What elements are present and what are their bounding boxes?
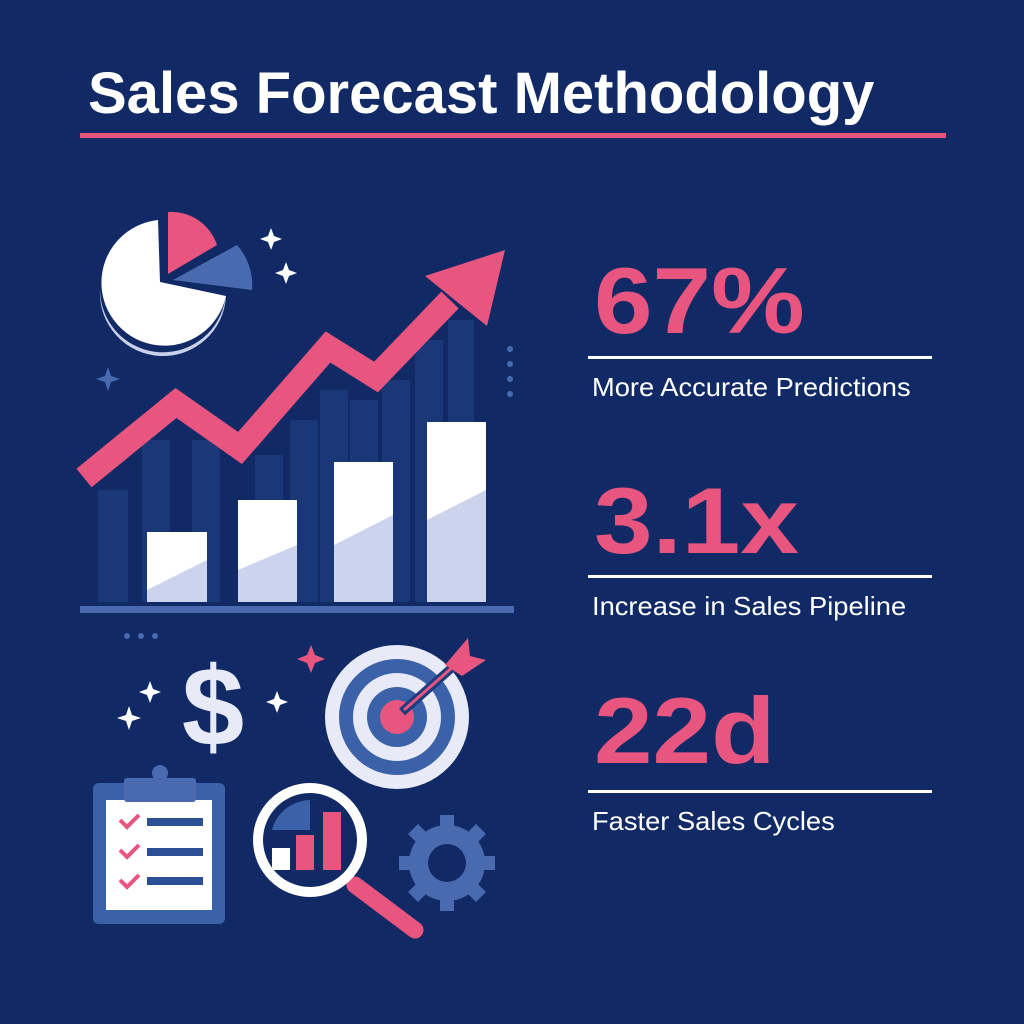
icon: target <box>325 638 486 789</box>
pie chart <box>100 212 252 356</box>
background columns <box>98 320 474 602</box>
icon: dollar <box>117 644 325 769</box>
icon: dollar: $ <box>182 644 244 769</box>
dots <box>124 346 513 639</box>
icon: clipboard <box>93 765 225 924</box>
icon: magnifier <box>253 783 415 930</box>
text: More Accurate Predictions <box>592 372 911 402</box>
rising arrow <box>84 250 505 478</box>
stat 1: 67% <box>594 248 805 353</box>
stat 2: 3.1x <box>594 468 799 573</box>
stat 3: 22d <box>594 678 775 783</box>
text: Faster Sales Cycles <box>592 806 835 836</box>
title: Sales Forecast Methodology <box>88 61 874 126</box>
sparkles <box>96 228 297 391</box>
bar chart <box>147 422 486 602</box>
baseline <box>80 606 514 613</box>
title underline <box>80 133 946 138</box>
text: Increase in Sales Pipeline <box>592 591 906 621</box>
icon: gear <box>399 815 495 911</box>
